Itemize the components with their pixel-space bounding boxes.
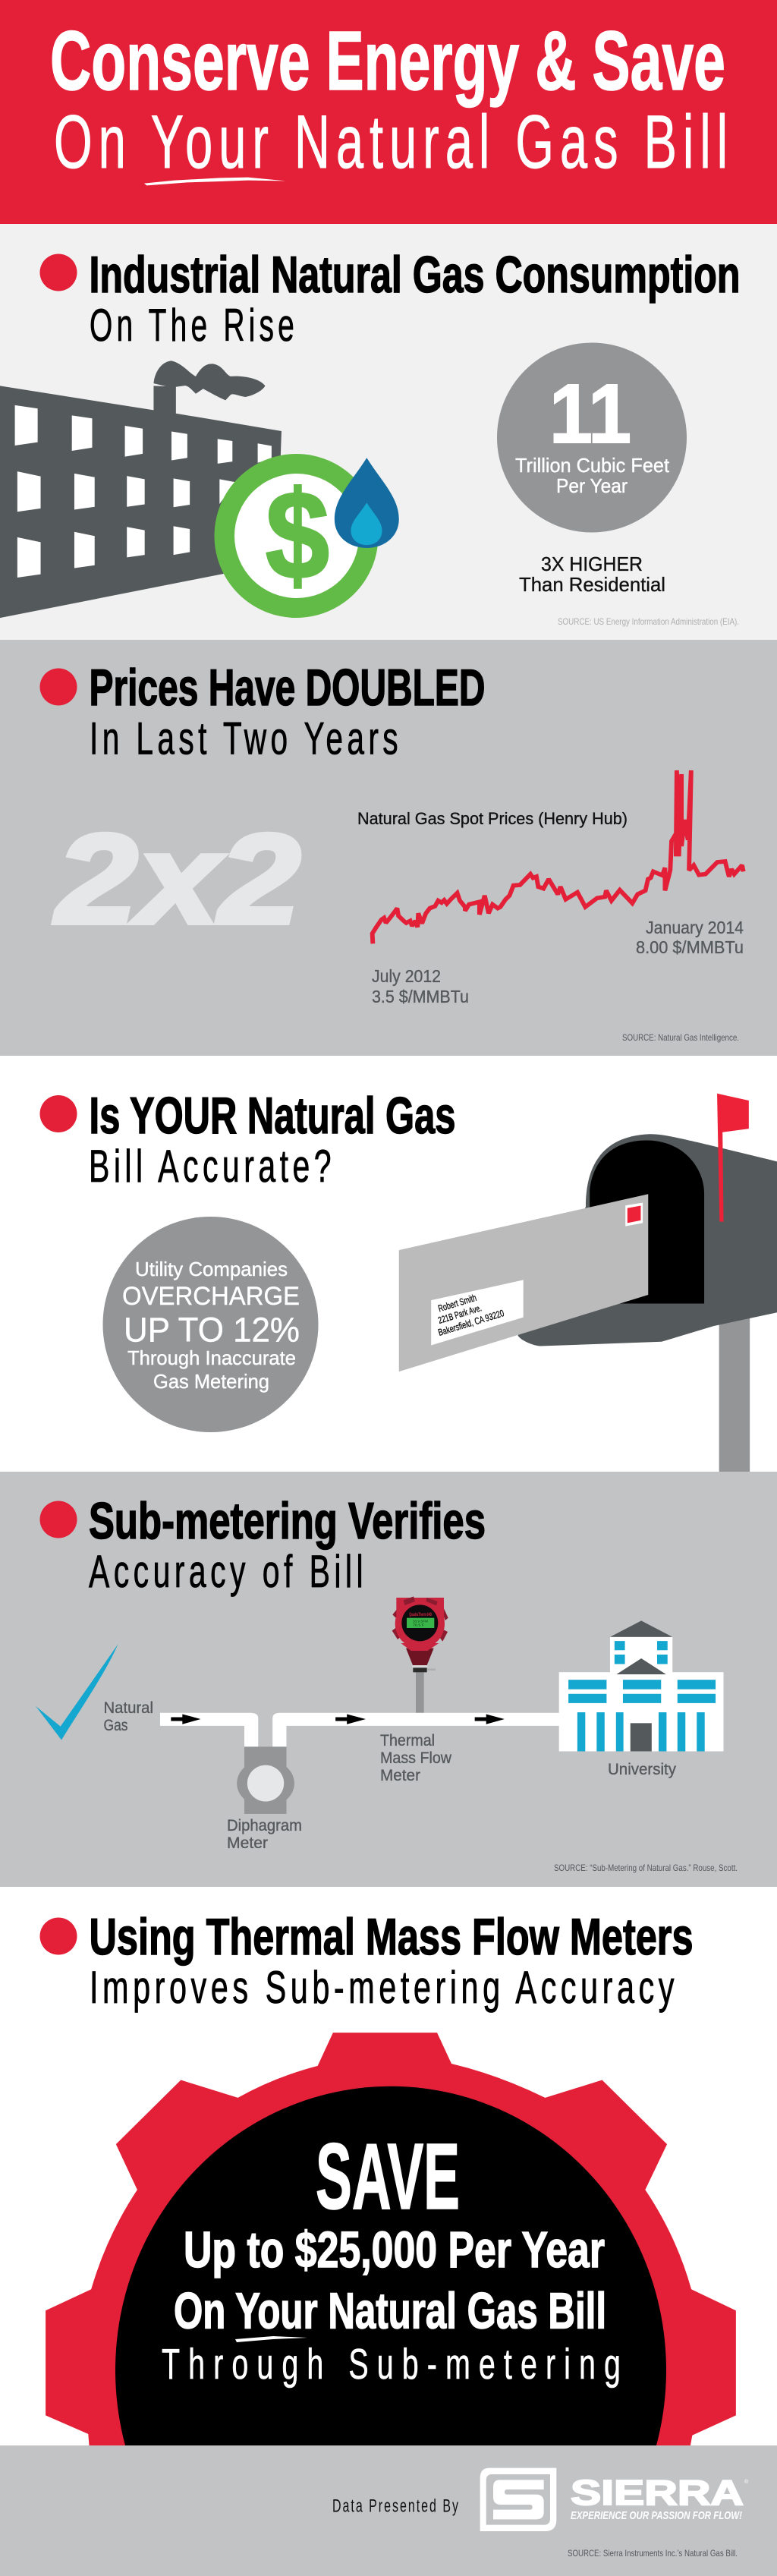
callout: 3x higher: 3X HIGHER xyxy=(541,553,643,575)
stat circle: 11 trillion cubic feet: Trillion Cubic Feet xyxy=(515,454,670,477)
icon: diaphragm meter xyxy=(237,1746,294,1814)
icon: envelope: Bakersfield, CA 93220 xyxy=(437,1308,505,1338)
data presented by: Data Presented By xyxy=(332,2496,460,2517)
label: diaphragm meter: Diphagram xyxy=(227,1817,302,1834)
label: natural gas: Natural xyxy=(103,1699,153,1717)
icon: dollar coin: $ xyxy=(266,465,329,605)
heading: Prices Have DOUBLED xyxy=(90,659,486,716)
icon: mailbox xyxy=(517,1094,777,1472)
label: diaphragm meter: Meter xyxy=(227,1834,268,1852)
panel: prices doubled xyxy=(0,640,777,1056)
label: university: University xyxy=(608,1761,676,1778)
icon: thermal mass flow meter xyxy=(392,1596,448,1713)
panel: footer xyxy=(0,2445,777,2576)
logo: Sierra: ® xyxy=(744,2479,749,2485)
logo: Sierra: SIERRA xyxy=(571,2473,744,2512)
savings message: SAVE xyxy=(316,2125,460,2229)
subheading: In Last Two Years xyxy=(90,713,402,764)
stat circle: overcharge xyxy=(103,1217,319,1432)
icon: thermal mass flow meter: 70.5 F xyxy=(413,1623,424,1627)
bullet xyxy=(39,1095,77,1132)
subheading: On The Rise xyxy=(90,300,298,351)
heading: Sub-metering Verifies xyxy=(89,1492,486,1550)
line chart: spot prices xyxy=(373,770,744,943)
black savings disc xyxy=(115,2086,666,2445)
logo: Sierra xyxy=(480,2468,749,2531)
savings message xyxy=(162,2125,629,2389)
panel: is your bill accurate xyxy=(0,1056,777,1472)
icon: envelope: Robert Smith xyxy=(437,1293,478,1314)
bullet xyxy=(39,1917,77,1955)
callout: 3x higher: Than Residential xyxy=(519,573,665,596)
label: January 2014: 8.00 $/MMBTu xyxy=(636,937,744,957)
label: January 2014: January 2014 xyxy=(646,918,744,937)
big 2x2: 2x2 xyxy=(54,808,300,950)
icon: dollar coin xyxy=(214,454,378,618)
stat circle: overcharge: UP TO 12% xyxy=(124,1310,300,1349)
subheading: Accuracy of Bill xyxy=(89,1546,367,1597)
icon: factory xyxy=(0,361,282,618)
stat circle: 11 trillion cubic feet: Per Year xyxy=(556,474,628,497)
icon: university building xyxy=(559,1620,724,1751)
source note: SOURCE: “Sub-Metering of Natural Gas.” Rouse, Scott. xyxy=(554,1863,738,1873)
stat circle: 11 trillion cubic feet: 11 xyxy=(549,367,631,461)
label: thermal mass flow meter: Mass Flow xyxy=(380,1749,452,1767)
icon: envelope xyxy=(399,1194,648,1371)
chart title: Natural Gas Spot Prices (Henry Hub) xyxy=(357,809,628,828)
source note: SOURCE: Sierra Instruments Inc.’s Natural Gas Bill. xyxy=(568,2548,738,2559)
subheading: Bill Accurate? xyxy=(89,1141,335,1192)
icon: checkmark xyxy=(36,1644,118,1740)
label: thermal mass flow meter: Thermal xyxy=(380,1732,435,1749)
stat circle: overcharge: OVERCHARGE xyxy=(122,1282,300,1311)
panel: header xyxy=(0,0,777,224)
heading: Is YOUR Natural Gas xyxy=(90,1087,455,1145)
label: natural gas: Gas xyxy=(103,1717,127,1734)
callout: 3x higher xyxy=(519,553,665,596)
pipeline with arrows xyxy=(160,1713,560,1746)
label: January 2014 xyxy=(636,918,744,957)
bullet xyxy=(39,1501,77,1538)
label: July 2012 xyxy=(372,966,469,1006)
bullet xyxy=(39,254,77,291)
label: July 2012: 3.5 $/MMBTu xyxy=(372,987,469,1006)
icon: red gear xyxy=(46,2033,736,2446)
panel: thermal mass flow meters xyxy=(0,1887,777,2446)
source note: SOURCE: US Energy Information Administration (EIA). xyxy=(558,616,739,627)
icon: thermal mass flow meter: 33.9 SFM xyxy=(413,1620,428,1623)
bullet xyxy=(39,668,77,706)
savings message: On Your Natural Gas Bill xyxy=(174,2283,606,2339)
label: thermal mass flow meter xyxy=(380,1732,452,1784)
source note: SOURCE: Natural Gas Intelligence. xyxy=(622,1032,739,1043)
stat circle: overcharge: Gas Metering xyxy=(153,1370,269,1393)
stat circle: overcharge: Utility Companies xyxy=(135,1258,288,1280)
label: July 2012: July 2012 xyxy=(372,966,441,986)
savings message: Up to $25,000 Per Year xyxy=(184,2222,605,2278)
brush underline under Your xyxy=(144,178,286,185)
icon: thermal mass flow meter: QuadraTherm 640i xyxy=(409,1613,433,1617)
icon: gas drop xyxy=(335,458,399,548)
panel: consumption on the rise xyxy=(0,224,777,640)
label: thermal mass flow meter: Meter xyxy=(380,1767,420,1784)
panel: sub-metering verifies xyxy=(0,1472,777,1887)
label: natural gas xyxy=(103,1699,153,1734)
stat circle: overcharge: Through Inaccurate xyxy=(127,1346,296,1369)
stat circle: 11 trillion cubic feet xyxy=(497,343,687,533)
label: diaphragm meter xyxy=(227,1817,302,1852)
icon: envelope: 221B Park Ave. xyxy=(437,1302,483,1326)
